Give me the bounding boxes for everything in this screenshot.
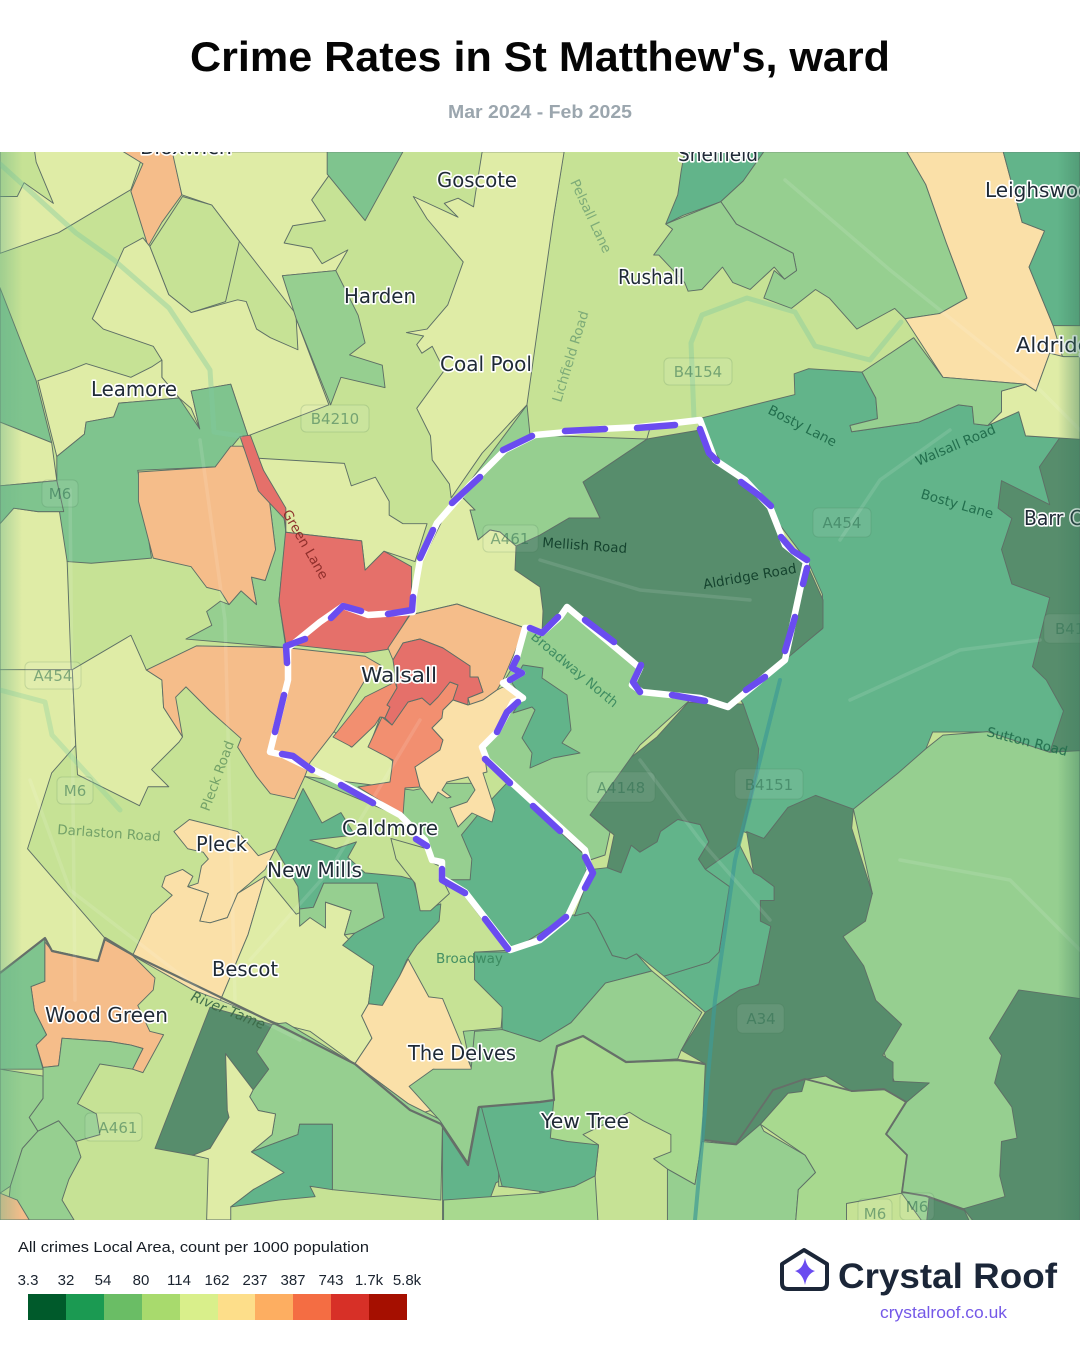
road name labels: Broadway [436,951,503,967]
peach north-east Walsall [388,604,525,705]
rivers and canals [0,164,901,1220]
legend scale labels: 32 [58,1272,74,1289]
place name labels: Leamore [91,377,177,401]
road name labels: Darlaston Road [57,822,161,845]
road number badges: A34 [746,1010,776,1028]
legend scale labels: 5.8k [393,1272,422,1289]
road number badges: M6 [49,485,71,503]
wordmark: Crystal Roof [838,1257,1057,1296]
pale region inside ward [410,495,543,633]
road name labels [57,177,1069,1033]
road name labels: Pelsall Lane [566,177,614,256]
road name labels: Green Lane [279,507,331,582]
legend scale labels: 743 [318,1272,344,1289]
cream south of Walsall [415,687,523,827]
legend scale labels [18,1272,422,1289]
place name labels: Wood Green [45,1003,168,1027]
place name labels: Coal Pool [440,352,532,376]
road number badges: M6 [906,1198,928,1216]
road name labels: Broadway North [527,629,621,711]
broadway north strip [482,607,690,860]
road number badges: B4154 [674,363,722,381]
road number badges [25,358,1080,1226]
road number badges: A461 [491,530,529,548]
place name labels: Yew Tree [540,1109,629,1133]
map edge shading [0,152,1080,1220]
road name labels: Walsall Road [913,422,998,470]
road number badges: A454 [34,667,72,685]
road name labels: Bosty Lane [919,486,995,522]
thick boundary lines [0,938,964,1210]
logo: Crystal Roof [782,1250,1057,1322]
legend scale labels: 387 [280,1272,306,1289]
legend scale labels: 162 [204,1272,230,1289]
legend scale labels: 237 [242,1272,268,1289]
road number badges: M6 [864,1205,886,1223]
mid green north ward region [460,405,647,546]
green pocket [512,665,580,768]
place name labels: Caldmore [342,816,438,840]
title: Crime Rates in St Matthew's, ward [190,33,890,80]
legend scale labels: 114 [167,1272,191,1289]
ward boundary: St Matthew's [270,420,807,950]
legend scale labels: 3.3 [18,1272,38,1289]
road name labels: Mellish Road [542,535,628,557]
subtitle: date range: Mar 2024 - Feb 2025 [448,102,632,122]
place name labels: Bloxwich [140,135,232,159]
legend scale labels: 80 [133,1272,149,1289]
place name labels: Goscote [437,168,517,192]
place name labels: Rushall [618,265,684,289]
place name labels: Harden [344,284,416,308]
place name labels: Shelfield [678,142,758,166]
legend colour bar [28,1294,407,1320]
road number badges: A461 [99,1119,137,1137]
place name labels: The Delves [407,1041,516,1065]
legend title: All crimes Local Area, count per 1000 population [18,1240,369,1256]
road number badges: A4148 [597,779,645,797]
icon: house with star [782,1250,827,1289]
road network [30,180,1080,1040]
road number badges: B4151 [745,776,793,794]
road name labels: Aldridge Road [702,561,798,593]
legend scale labels: 54 [95,1272,111,1289]
red central Walsall [385,639,483,725]
place name labels: Walsall [361,663,437,687]
salmon main [358,682,458,815]
road number badges: M6 [64,782,86,800]
road name labels: Bosty Lane [765,402,839,451]
legend scale labels: 1.7k [355,1272,384,1289]
website url: crystalroof.co.uk [880,1304,1008,1322]
place name labels: New Mills [267,858,362,882]
salmon west [333,682,397,747]
road number badges: A454 [823,514,861,532]
road name labels: Lichfield Road [550,309,592,404]
place name labels: Pleck [196,832,247,856]
place name labels [45,135,1080,1133]
road name labels: Sutton Road [985,724,1069,760]
road name labels: River Tame [189,989,267,1033]
road name labels: Pleck Road [198,739,238,813]
place name labels: Bescot [212,957,278,981]
dark ward-north region [515,430,823,707]
road number badges: B4210 [311,410,359,428]
